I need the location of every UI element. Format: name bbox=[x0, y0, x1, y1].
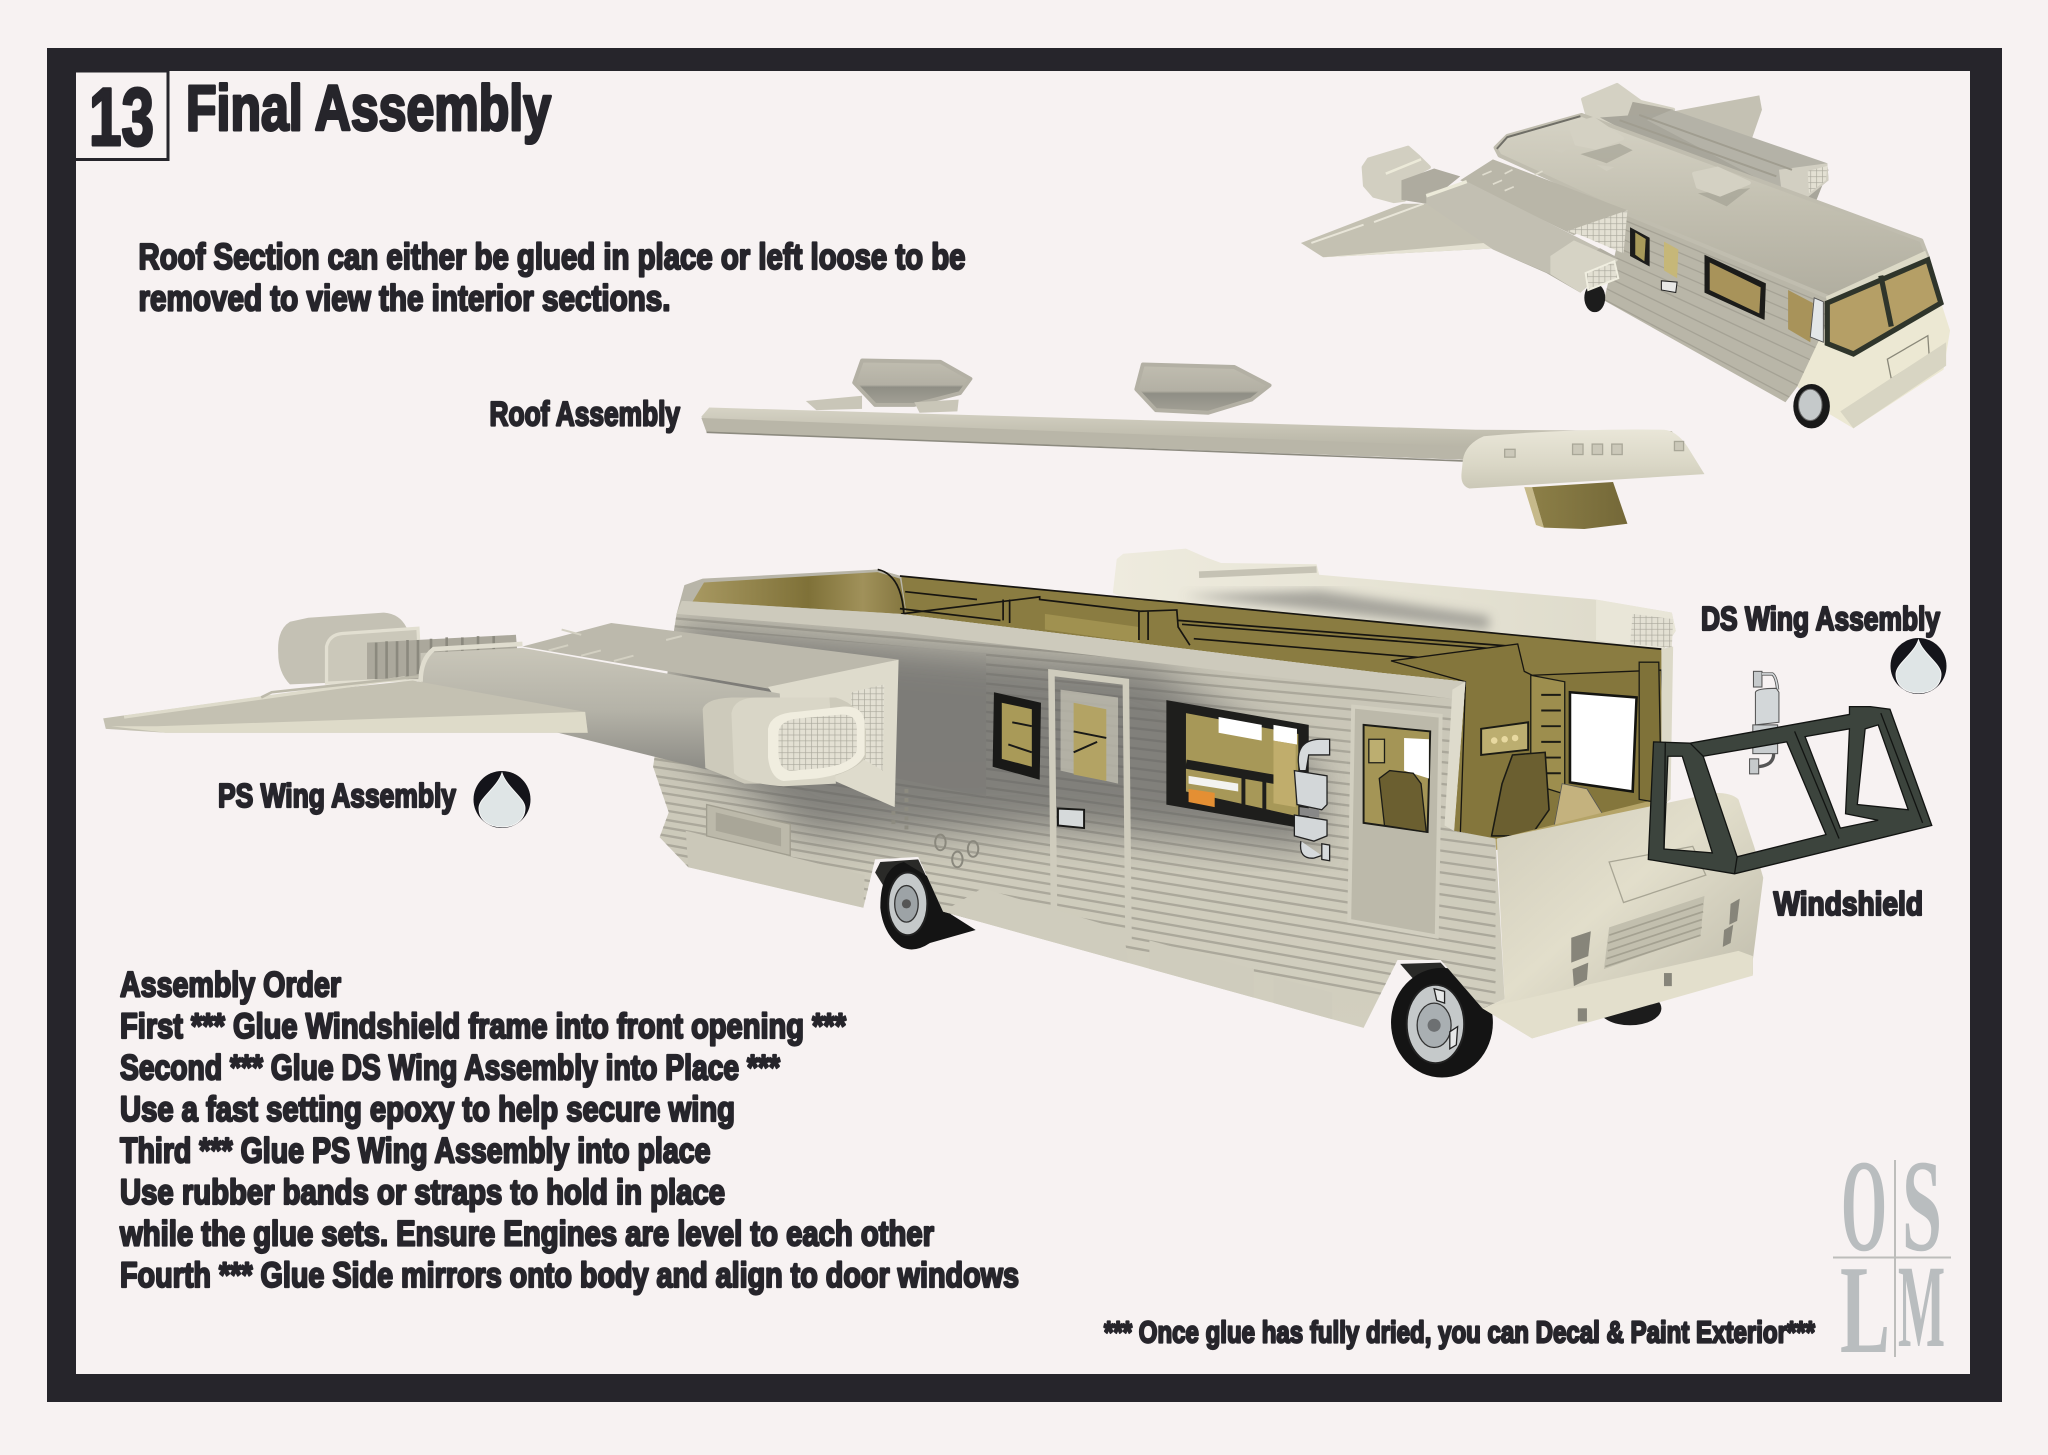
mini far engine and wing bbox=[1583, 85, 1829, 202]
top lip of near wall bbox=[677, 601, 1465, 700]
vent circles bbox=[935, 835, 978, 867]
wheel arch interiors bbox=[875, 859, 943, 914]
assembly order text: First *** Glue Windshield frame into front opening *** bbox=[120, 1007, 846, 1046]
assembly order text: while the glue sets. Ensure Engines are level to each other bbox=[119, 1214, 934, 1254]
assembly order text bbox=[119, 966, 1019, 1295]
rear wheel of body bbox=[880, 862, 976, 949]
icon: glue drop PS bbox=[474, 771, 530, 828]
near body side bbox=[653, 601, 1505, 1078]
footer note: *** Once glue has fully dried, you can Decal & Paint Exterior*** bbox=[1104, 1314, 1816, 1350]
mini roof details bbox=[1550, 115, 1792, 206]
main wing bbox=[103, 677, 588, 733]
roof pod 2 bbox=[1136, 364, 1270, 413]
cockpit walls bbox=[1391, 644, 1667, 849]
assembly order text: Fourth *** Glue Side mirrors onto body and align to door windows bbox=[120, 1256, 1019, 1295]
large window bbox=[1166, 700, 1309, 829]
roof assembly bbox=[701, 360, 1704, 529]
assembly order text: Second *** Glue DS Wing Assembly into Place *** bbox=[120, 1048, 780, 1088]
mini wheels bbox=[1584, 283, 1830, 428]
roof note text: removed to view the interior sections. bbox=[138, 278, 670, 318]
mini body bbox=[1496, 115, 1950, 428]
infographic page: M bbox=[1898, 1241, 1945, 1372]
front grille bbox=[1604, 896, 1704, 969]
mount front face bbox=[768, 660, 899, 807]
assembly order text: Third *** Glue PS Wing Assembly into place bbox=[120, 1132, 710, 1170]
roof pod 1 bbox=[854, 360, 970, 405]
boom bbox=[421, 648, 784, 771]
engine exhaust bbox=[278, 613, 517, 684]
hull ladder vent bbox=[893, 784, 906, 831]
passenger side wing bbox=[103, 613, 906, 831]
near wall end edge bbox=[1445, 682, 1465, 831]
door bbox=[1051, 673, 1128, 938]
assembly order text: Use rubber bands or straps to hold in place bbox=[120, 1173, 725, 1212]
roof pad rear bbox=[806, 396, 862, 410]
smooth section behind wing bbox=[668, 628, 986, 680]
license plate recess bbox=[1609, 846, 1706, 903]
loose side mirror bbox=[1750, 671, 1779, 774]
OSLM logo: L bbox=[1840, 1241, 1890, 1380]
label: PS Wing Assembly: PS Wing Assembly bbox=[218, 777, 457, 814]
roof support bbox=[1524, 482, 1627, 529]
assembly order text: Use a fast setting epoxy to help secure wing bbox=[120, 1090, 735, 1129]
front wheel of body bbox=[1391, 968, 1493, 1078]
OSLM logo bbox=[1833, 1132, 1951, 1380]
interior of body bbox=[677, 569, 1673, 852]
mini plate and boom bbox=[1426, 159, 1627, 293]
mini near wing bbox=[1301, 148, 1499, 257]
roof pad front bbox=[914, 400, 959, 413]
nacelle bbox=[703, 697, 866, 786]
roof vents bbox=[1505, 441, 1684, 457]
label: Roof Assembly: Roof Assembly bbox=[490, 396, 680, 434]
rear window bbox=[993, 692, 1041, 780]
rear hatch vent bbox=[707, 805, 790, 856]
OSLM logo: S bbox=[1902, 1132, 1942, 1279]
OSLM logo: O bbox=[1841, 1132, 1887, 1279]
roof note text bbox=[138, 236, 966, 318]
step number box: 13 bbox=[89, 72, 154, 163]
mini windows bbox=[1630, 227, 1823, 342]
rear wheel behind front bbox=[1599, 991, 1661, 1025]
assembly order text: Assembly Order bbox=[120, 966, 341, 1004]
icon: glue drop DS bbox=[1890, 638, 1946, 694]
label: DS Wing Assembly: DS Wing Assembly bbox=[1701, 600, 1941, 637]
front of body bbox=[1482, 793, 1763, 1038]
label: Windshield: Windshield bbox=[1774, 885, 1923, 922]
title: Final Assembly bbox=[186, 72, 551, 144]
roof note text: Roof Section can either be glued in place or left loose to be bbox=[138, 236, 966, 277]
cockpit window opening bbox=[1570, 692, 1637, 792]
illustration: completed model top view bbox=[103, 85, 1950, 1078]
skirt panels bbox=[686, 831, 865, 908]
mount plate bbox=[522, 623, 899, 690]
front vents bbox=[1571, 899, 1740, 1021]
attached side mirror bbox=[1294, 739, 1330, 861]
driver side wing behind body bbox=[1113, 549, 1676, 653]
far body edge bbox=[1661, 647, 1673, 807]
wing shadow on side bbox=[679, 627, 1319, 849]
cab door bbox=[1349, 707, 1441, 936]
windshield frame bbox=[1648, 707, 1932, 874]
interior partition lines bbox=[878, 569, 1661, 662]
